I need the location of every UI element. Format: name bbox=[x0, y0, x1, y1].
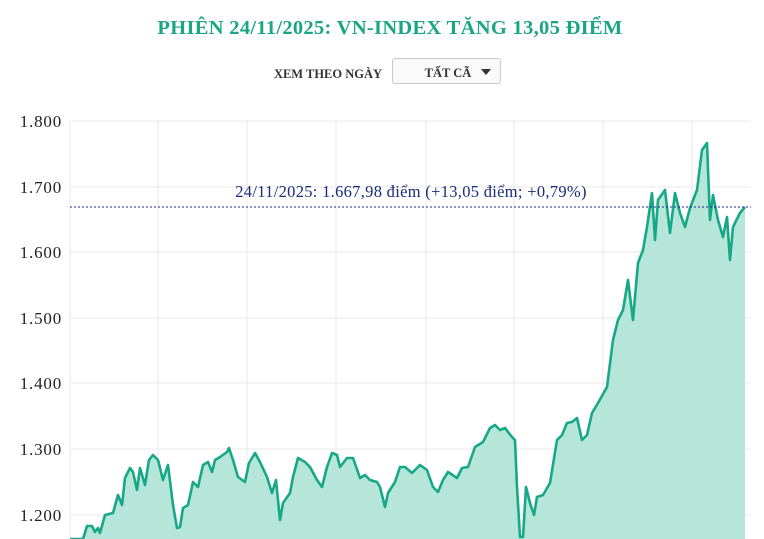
y axis labels: 1.300 bbox=[20, 440, 62, 459]
y axis labels: 1.200 bbox=[20, 506, 62, 525]
y axis labels: 1.500 bbox=[20, 309, 62, 328]
y axis labels: 1.600 bbox=[20, 243, 62, 262]
dropdown: TẤT CÃ bbox=[425, 65, 471, 80]
annotation: 24/11/2025: 1.667,98 điểm (+13,05 điểm; +0,79%) bbox=[235, 182, 587, 201]
reference line bbox=[70, 206, 751, 208]
area chart bbox=[70, 143, 745, 539]
y axis labels bbox=[20, 112, 62, 525]
filter label: XEM THEO NGÀY bbox=[274, 67, 382, 81]
y axis labels: 1.400 bbox=[20, 374, 62, 393]
y axis labels: 1.800 bbox=[20, 112, 62, 131]
dropdown bbox=[392, 58, 500, 84]
title: PHIÊN 24/11/2025: VN-INDEX TĂNG 13,05 ĐIỂM bbox=[157, 15, 623, 39]
y axis labels: 1.700 bbox=[20, 178, 62, 197]
